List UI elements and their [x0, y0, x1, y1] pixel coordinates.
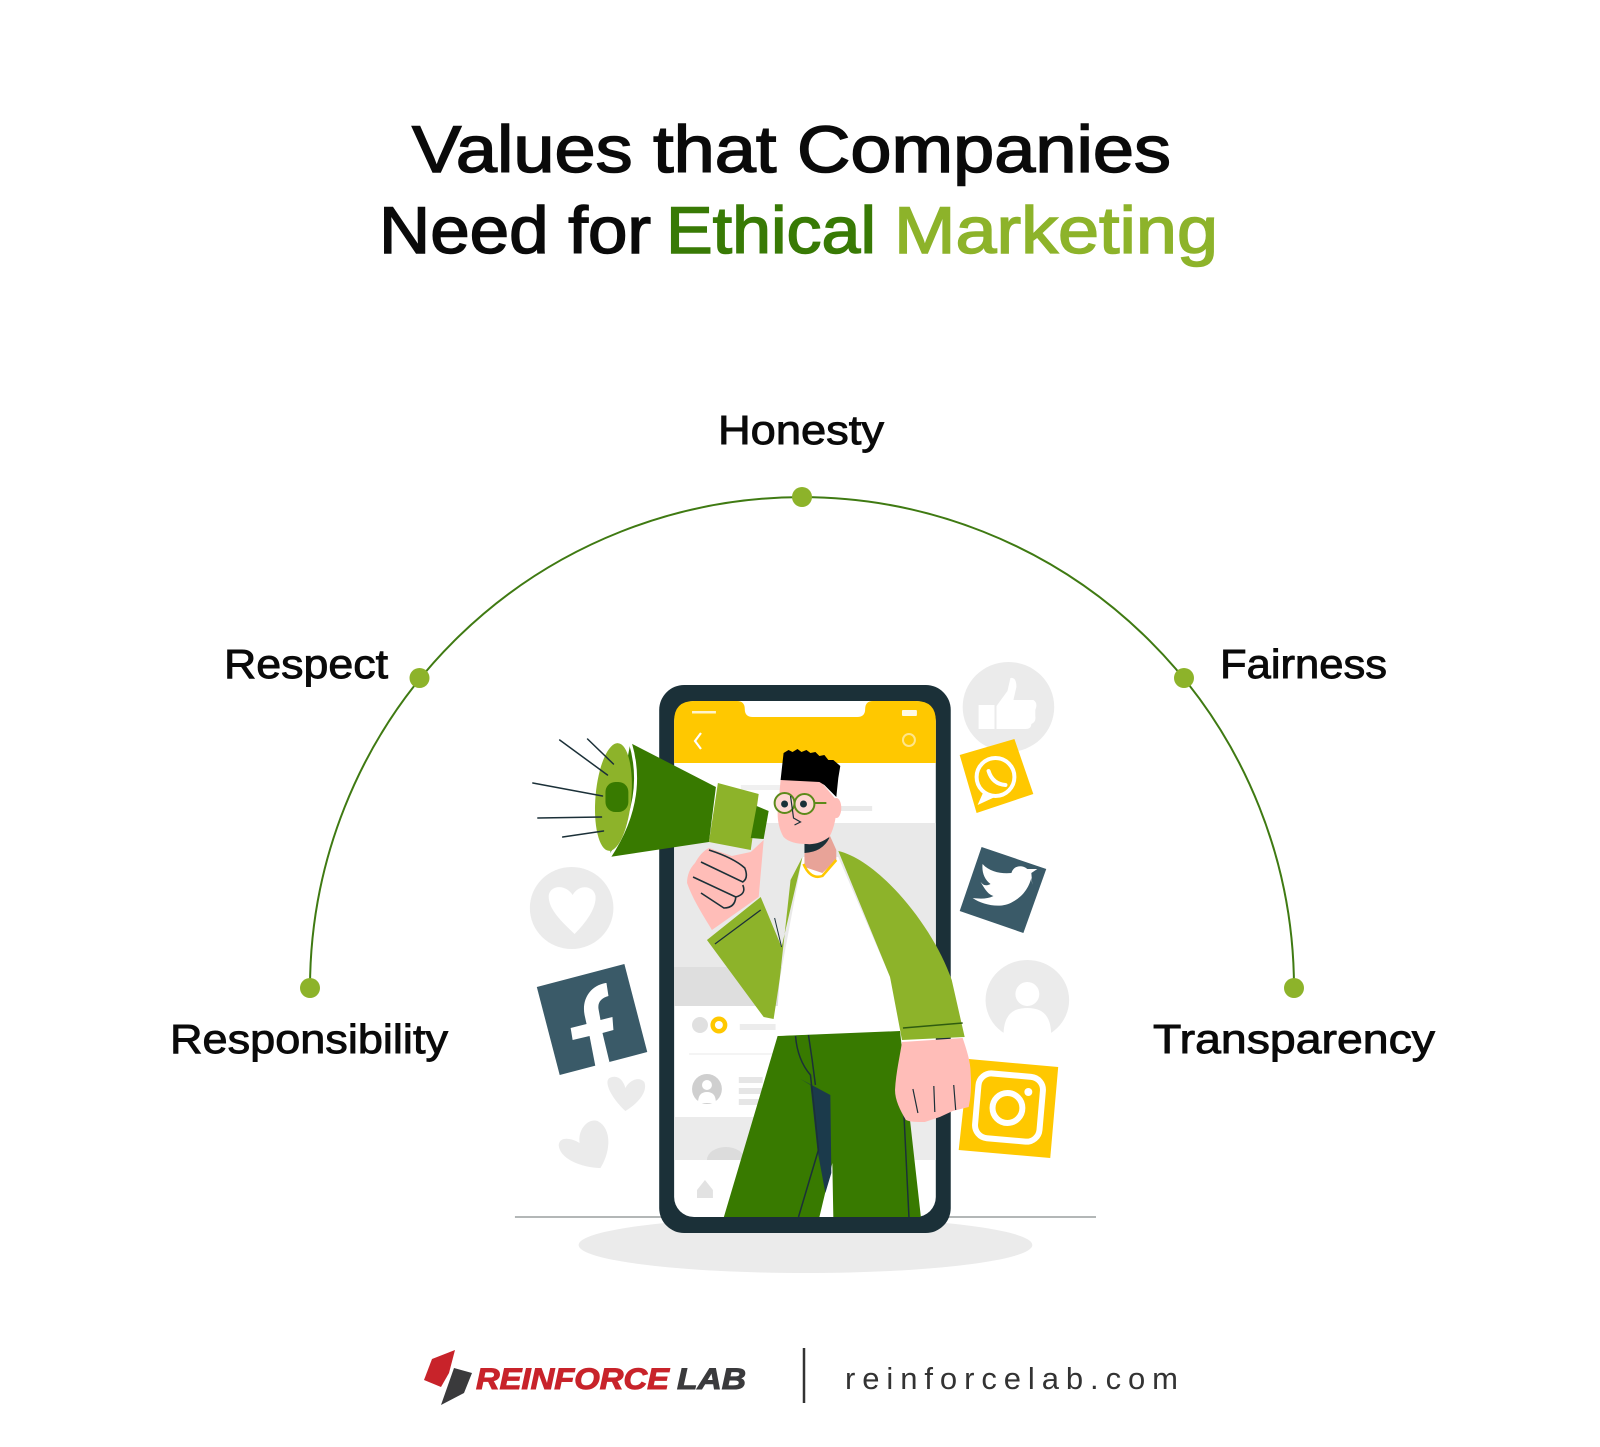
icon: person circle	[986, 960, 1069, 1040]
dot: respect	[410, 668, 430, 688]
right hand	[895, 1038, 971, 1122]
title: Values that Companies	[412, 112, 1171, 186]
logo mark	[424, 1350, 472, 1405]
logo text: LAB: LAB	[677, 1363, 746, 1396]
label: Responsibility: Responsibility	[170, 1016, 449, 1062]
collar	[803, 860, 836, 877]
megaphone bell	[609, 743, 716, 857]
label: Fairness: Fairness	[1220, 641, 1387, 687]
icon: facebook	[537, 964, 647, 1075]
sound lines	[533, 739, 613, 837]
phone screen	[674, 701, 936, 1217]
label: Honesty: Honesty	[718, 407, 885, 453]
right sleeve	[838, 851, 965, 1040]
website url: reinforcelab.com	[845, 1361, 1178, 1396]
dot: honesty	[792, 487, 812, 507]
icon: twitter	[960, 847, 1046, 933]
title: Marketing	[894, 193, 1218, 267]
dot: fairness	[1174, 668, 1194, 688]
illustration: person with megaphone in phone	[515, 662, 1096, 1273]
head	[775, 749, 841, 844]
icon: small heart	[607, 1077, 645, 1111]
arc of values	[300, 487, 1304, 998]
icon: whatsapp	[960, 739, 1033, 813]
icon: instagram	[959, 1059, 1058, 1158]
megaphone	[533, 739, 769, 857]
ground line	[515, 1216, 1096, 1218]
label: Respect: Respect	[224, 641, 389, 687]
title	[379, 112, 1218, 267]
label: Transparency: Transparency	[1153, 1016, 1436, 1062]
dot: transparency	[1284, 978, 1304, 998]
title: Need for	[379, 193, 651, 267]
icon: thumbs up circle	[963, 662, 1054, 752]
white shirt	[776, 857, 902, 1036]
person	[533, 739, 971, 1217]
phone	[659, 685, 951, 1233]
icon: heart circle	[530, 867, 613, 949]
megaphone mouth	[591, 742, 636, 852]
icon: large heart	[559, 1121, 608, 1168]
ground shadow	[579, 1217, 1032, 1273]
divider	[803, 1348, 805, 1403]
title: Ethical	[666, 193, 876, 267]
logo text: REINFORCE: REINFORCE	[476, 1363, 670, 1396]
megaphone body	[709, 783, 759, 850]
dot: responsibility	[300, 978, 320, 998]
trousers	[724, 1031, 921, 1217]
left hand	[687, 840, 764, 930]
footer	[424, 1348, 1178, 1405]
left sleeve	[707, 857, 802, 1019]
neck	[804, 830, 836, 873]
